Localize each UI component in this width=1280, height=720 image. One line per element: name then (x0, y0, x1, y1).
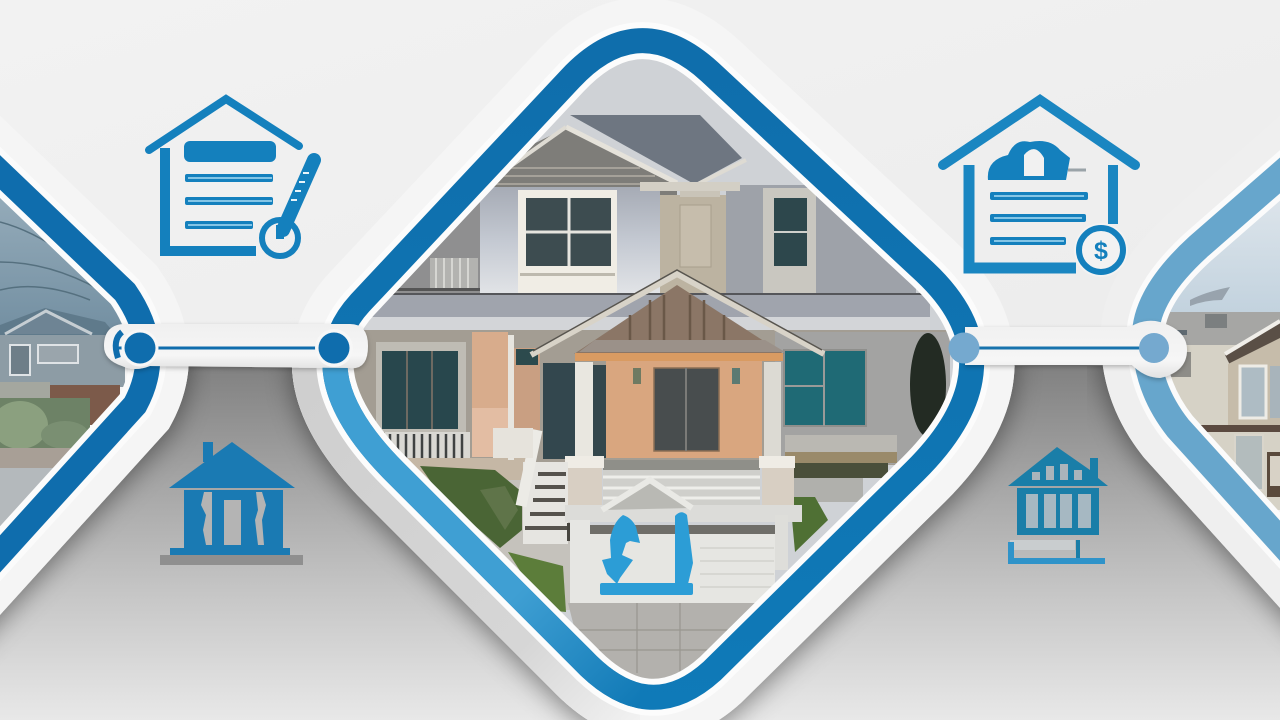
panel: right diamond frame (1120, 123, 1280, 607)
dollar label: $ (1094, 237, 1108, 265)
icon: framed house (1008, 447, 1108, 561)
node (315, 329, 353, 367)
porch wall and door (606, 360, 762, 458)
panel: central diamond frame (320, 20, 1040, 720)
lower-left lighter band (322, 368, 640, 709)
gable trim and beam (566, 127, 677, 183)
porch floor (603, 470, 760, 505)
lower-left frame band shading (292, 368, 618, 720)
icon: inspection checklist house (149, 99, 314, 256)
icon: cost estimate house (943, 100, 1135, 277)
photo: left house (0, 198, 125, 526)
garage (565, 505, 802, 522)
photo: central house (354, 59, 954, 679)
node (948, 332, 980, 364)
frame shadows in the lower half (0, 193, 1280, 720)
porch gable (574, 285, 784, 354)
icon: figure on garage door (600, 512, 693, 595)
upper storey walls (394, 202, 480, 293)
photo: right house (1166, 201, 1280, 510)
stairs (523, 462, 568, 544)
planting and ground left (430, 480, 570, 610)
pillars (575, 362, 593, 458)
upper roof (570, 115, 742, 184)
driveway (568, 603, 754, 679)
background upper (0, 0, 1280, 370)
lower wall (330, 330, 950, 465)
connector: right (948, 321, 1187, 378)
panel: left diamond frame (0, 110, 180, 620)
small gable over garage (602, 480, 692, 510)
node (1139, 333, 1169, 363)
mid band (350, 295, 930, 317)
planting and ground right (793, 463, 888, 478)
right upper window (763, 188, 816, 293)
upper window (518, 190, 617, 293)
node (122, 330, 158, 366)
piers (568, 468, 602, 505)
upper gable (494, 130, 677, 195)
icon: damaged house (160, 442, 303, 565)
background lower (0, 360, 1280, 720)
connector: left (104, 324, 368, 369)
right lower (775, 332, 950, 464)
